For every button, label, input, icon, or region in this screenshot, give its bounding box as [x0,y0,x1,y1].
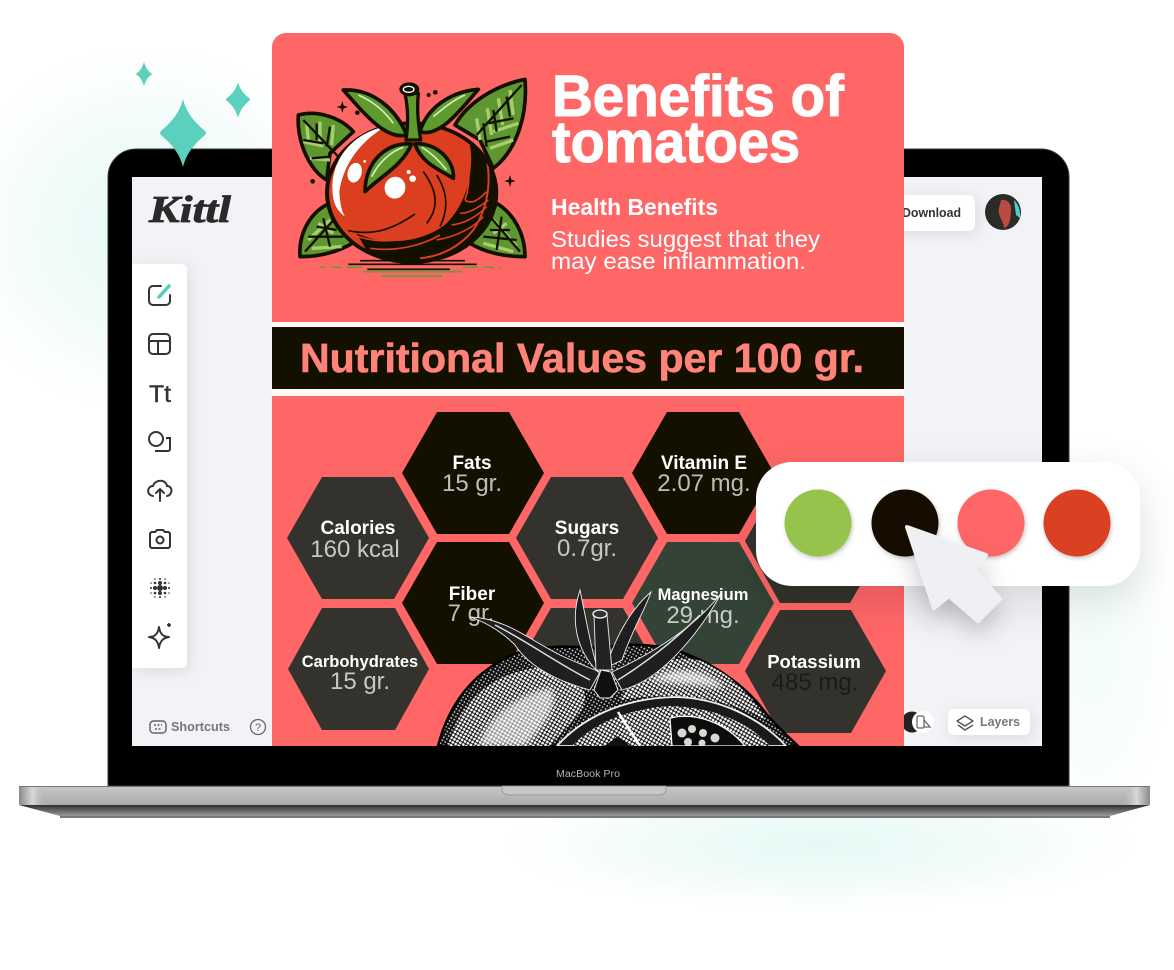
leaf veins [303,85,522,252]
hexagon: Potassium: 485 mg. [772,669,858,696]
nutrition banner [272,322,904,396]
help icon: ? [255,722,261,734]
red rim on the right [420,162,490,260]
red hatch [358,175,489,250]
hexagon: Fats: 15 gr. [442,470,502,497]
hexagon: Magnesium [632,542,774,664]
Kittl logo: Kittl [148,189,232,231]
halftone shading [448,659,765,746]
app screen [132,177,1042,746]
sepals [470,590,722,690]
hexagon: center bottom [533,608,644,646]
sparkles [136,62,250,167]
hexagon: Fats: Fats [452,453,492,474]
title: tomatoes [552,110,800,175]
layers button [948,709,1030,735]
hexagon: Calories: Calories [321,518,395,539]
hexagon: Carbohydrates: Carbohydrates [302,653,418,671]
ground lines [320,261,501,276]
poster: benefits of tomatoes [272,33,904,746]
hexagon: Fiber: 7 gr. [448,600,494,627]
health benefits heading: Health Benefits [551,194,718,220]
sidebar toolbar [132,264,187,668]
health benefits text [551,226,821,274]
title [552,73,845,163]
nutrition banner: Nutritional Values per 100 gr. [300,335,864,381]
hexagon: Magnesium: Magnesium [658,586,748,604]
icon: text: Tt [149,381,171,408]
hexagon: Carbohydrates [288,608,429,730]
highlights [345,160,416,202]
stem [405,93,421,140]
health benefits text: may ease inflammation. [551,248,806,274]
download button [860,195,975,231]
illustration: colored tomato with leaves [298,79,525,276]
icon: camera [150,530,170,548]
hexagon: Sugars: 0.7gr. [557,535,617,562]
illustration: engraved tomato [438,590,798,746]
swatch: red [1044,490,1110,556]
tomato body [438,645,798,746]
leaves [298,79,525,257]
icon: upload [148,481,172,501]
swatch: green [784,490,852,556]
laptop base [19,786,1150,817]
laptop label: MacBook Pro [556,769,620,780]
tomato body [325,121,498,264]
icon: halftone [150,578,170,598]
hexagon: Fats [402,412,544,534]
sparkle: large [160,99,206,167]
hexagon: Carbohydrates: 15 gr. [330,668,390,695]
black engraving [348,172,446,232]
sepals [343,89,478,192]
color palette card [756,462,1140,586]
hexagon: Vitamin E: Vitamin E [661,453,747,474]
icon: edit [149,286,170,305]
hexagon: Vitamin E [632,412,774,534]
icon: templates [149,334,170,354]
hexagon: Magnesium: 29 mg. [666,602,740,629]
hexagon: hidden behind palette [745,522,860,603]
health benefits text: Studies suggest that they [551,226,821,252]
icon: cursor arrow [907,527,1000,621]
sepal streaks [495,615,700,680]
white rim [332,128,380,216]
swatch: coral [958,490,1024,556]
icon: AI sparkle [149,623,171,648]
title: Benefits of [552,64,845,129]
hexagon: Potassium: Potassium [767,651,861,672]
hexagon: Sugars: Sugars [555,518,619,539]
theme toggle [902,711,934,733]
hexagon: Vitamin E: 2.07 mg. [657,470,751,497]
hexagon: Sugars [516,477,658,599]
help icon [250,720,266,734]
hexagon: Fiber: Fiber [449,584,496,605]
leaf stripes [303,90,518,252]
hexagon: Calories [287,477,429,599]
hexagon: Fiber [402,542,544,664]
laptop: MacBook Pro [19,149,1150,817]
hexagon: Potassium [745,610,886,733]
hexagon: Calories: 160 kcal [310,536,400,563]
cut half [557,697,786,746]
download button: Download [902,206,961,220]
dark shadow crescent [356,144,494,260]
shortcuts link: Shortcuts [171,720,230,734]
swatch: black [872,490,938,556]
layers button: Layers [980,715,1020,729]
stem [593,610,618,698]
sparkle: small [136,62,152,86]
sparkle: medium [226,82,250,118]
user avatar [985,194,1021,230]
laptop lid [108,149,1069,786]
icon: shapes [149,432,170,451]
small sparkles and dots [310,90,516,187]
